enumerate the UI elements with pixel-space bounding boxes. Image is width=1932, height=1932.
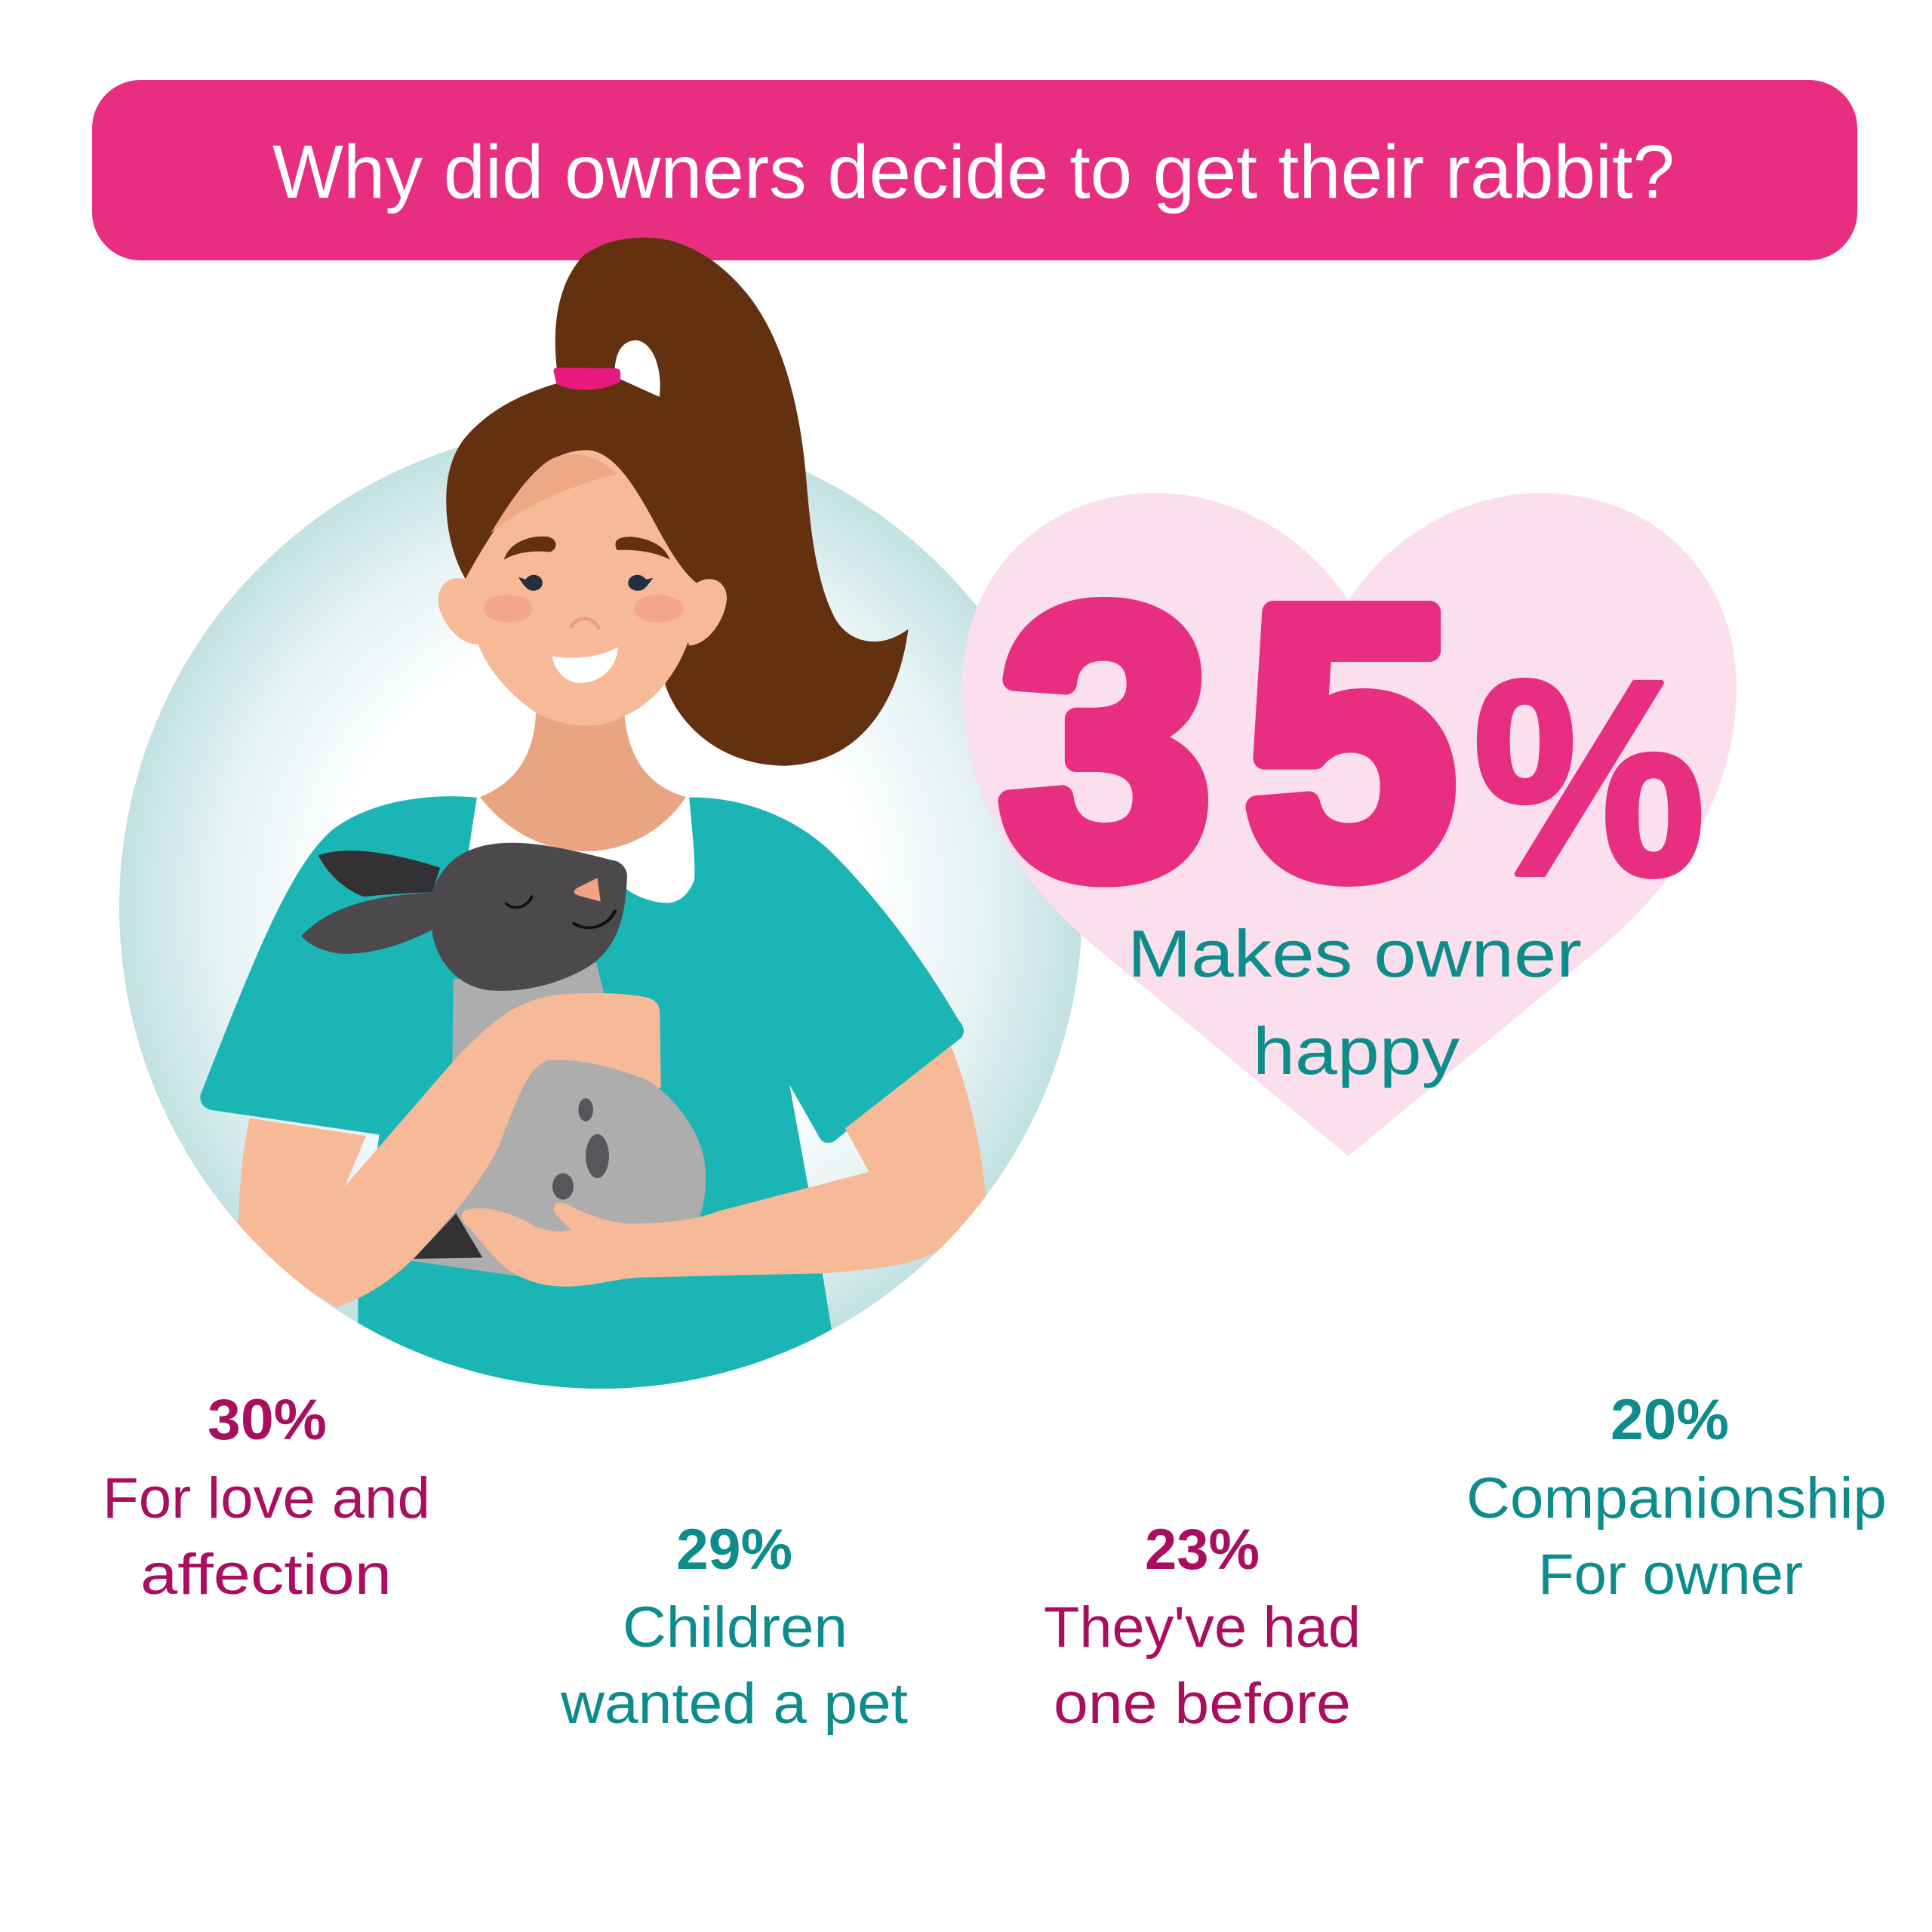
rabbit spots (552, 1098, 609, 1200)
left arm (220, 993, 661, 1307)
caption line two: happy (1253, 1014, 1460, 1088)
rabbit body (411, 1060, 706, 1278)
statistic: 30% for love and affection: 30% (208, 1388, 327, 1452)
nose (571, 619, 598, 628)
illustration: woman holding rabbit (200, 238, 1035, 1447)
face shape (466, 450, 697, 725)
shirt (200, 796, 964, 1447)
right arm and hand (461, 1046, 1035, 1287)
rabbit mouth (574, 911, 615, 928)
title text: Why did owners decide to get their rabbit? (272, 130, 1675, 214)
statistic: 20% companionship for owner: For owner (1538, 1543, 1803, 1607)
statistic: 29% children wanted a pet (560, 1518, 908, 1736)
arms and rabbit (220, 843, 1035, 1307)
hair band (553, 368, 620, 390)
statistic: 30% for love and affection: For love and (103, 1466, 430, 1531)
rabbit nose (574, 878, 601, 902)
face (438, 450, 727, 725)
statistic: 20% companionship for owner (1466, 1388, 1887, 1607)
statistic: 30% for love and affection: affection (140, 1543, 392, 1607)
rabbit eye (506, 897, 532, 907)
neck and collar (466, 702, 694, 903)
statistic: 29% children wanted a pet: Children (623, 1595, 848, 1660)
hair and ponytail (446, 238, 909, 766)
ears (438, 578, 727, 646)
rabbit head (432, 843, 627, 991)
statistic: 20% companionship for owner: 20% (1611, 1388, 1729, 1452)
gap in ponytail (614, 340, 660, 397)
gradient circle backdrop (119, 426, 1082, 1389)
percent sign: % (1473, 623, 1706, 933)
statistic: 20% companionship for owner: Companionship (1466, 1466, 1887, 1531)
heart shape (962, 493, 1737, 1156)
white collar (466, 795, 694, 903)
smile (552, 648, 618, 683)
big number 35: 35 (1001, 530, 1455, 952)
rabbit neck (452, 963, 607, 1066)
caption line one: Makes owner (1128, 916, 1582, 991)
forehead shadow (491, 454, 617, 533)
cheeks (484, 595, 683, 623)
neck (480, 702, 686, 851)
statistic: 23% they've had one before: one before (1054, 1672, 1351, 1736)
rabbit back ear (318, 851, 440, 897)
statistic: 29% children wanted a pet: wanted a pet (560, 1672, 908, 1736)
statistic: 23% they've had one before: 23% (1145, 1518, 1260, 1582)
eyebrows (504, 537, 670, 560)
eyes (518, 575, 653, 591)
rabbit front ear (301, 893, 438, 954)
title banner (92, 80, 1857, 260)
heart with main statistic (962, 493, 1737, 1156)
statistic: 23% they've had one before: They've had (1044, 1595, 1361, 1660)
statistic: 29% children wanted a pet: 29% (676, 1518, 792, 1582)
banner background (92, 80, 1857, 260)
statistic: 23% they've had one before (1044, 1518, 1361, 1736)
statistic: 30% for love and affection (103, 1388, 430, 1607)
rabbit foot (414, 1214, 482, 1259)
